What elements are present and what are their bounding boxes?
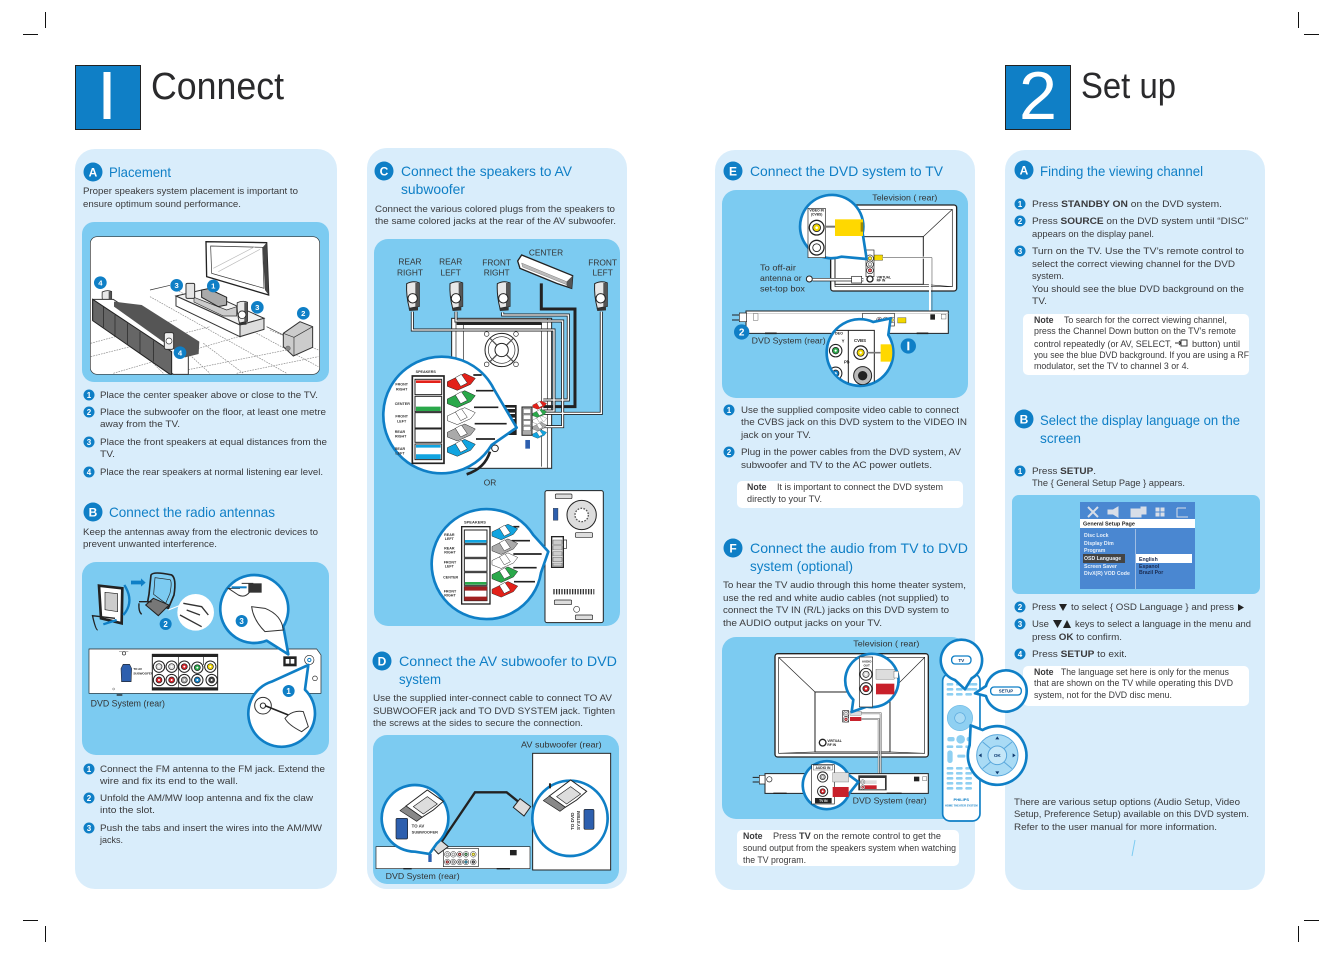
list: antenna steps: Push the tabs and insert the wires into the AM/MW (100, 823, 322, 833)
illustration: room speaker placement: 3 (175, 281, 179, 290)
heading: E Connect the DVD system: Connect the DVD system to TV (750, 163, 944, 179)
illustration: video cable to TV: antenna or (760, 273, 802, 283)
list: placement steps: 2 (87, 408, 92, 417)
text: audio intro (723, 580, 966, 628)
section badge: 1 (76, 66, 140, 130)
illustration: speaker wiring diagram: CENTER (443, 576, 459, 580)
illustration: speaker wiring diagram: SPEAKERS (416, 370, 436, 374)
list: placement steps: Place the subwoofer on the floor, at least one metre (100, 407, 326, 417)
illustration: audio cable TV to DVD: Television ( rear) (853, 639, 919, 649)
text: audio intro: use the red and white audio cables (not supplied) to (723, 593, 949, 603)
list: language steps: press OK to confirm. (1032, 632, 1122, 642)
heading: F Connect the audio (724, 538, 968, 574)
list: channel steps: Turn on the TV. Use the TV’s remote control to (1032, 246, 1244, 256)
text: audio intro: To hear the TV audio through this home theater system, (723, 580, 966, 590)
illustration: antennas wiring: DVD System (rear) (91, 699, 165, 709)
illustration: setup menu screen: OSD Language (1084, 556, 1121, 562)
heading: D Connect the AV subwoofer: system (399, 671, 441, 687)
illustration: video cable to TV: Pb (844, 360, 850, 365)
illustration: audio cable TV to DVD: AUDIO (862, 660, 872, 664)
list: language steps: keys to select a language in the menu and (1075, 619, 1251, 629)
illustration: speaker wiring diagram: RIGHT (397, 268, 423, 278)
note: channel search: modulator, set the TV to channel 3 or 4. (1034, 361, 1189, 371)
heading: D Connect the AV subwoofer: Connect the AV subwoofer to DVD (399, 653, 617, 669)
list: press setup (1014, 466, 1185, 488)
text: subwoofer intro (373, 693, 615, 728)
illustration: audio cable TV to DVD: VIRTUAL (827, 739, 842, 743)
illustration: speaker wiring diagram: REAR (444, 533, 455, 537)
list: DVD to TV steps: subwoofer and TV to the AC power outlets. (741, 460, 932, 470)
note: connect DVD directly (737, 481, 963, 508)
illustration: room speaker placement: 3 (255, 303, 259, 312)
list: language steps: 2 (1018, 603, 1023, 612)
list: channel steps: TV. (1032, 296, 1047, 306)
section badge: 2: 2 (1019, 58, 1057, 134)
illustration: speaker wiring diagram: FRONT (395, 415, 409, 419)
illustration: room speaker placement: 4 (98, 278, 103, 287)
list: DVD to TV steps: 2 (727, 448, 732, 457)
list: language steps (1014, 602, 1251, 660)
illustration: speaker wiring diagram: RIGHT (395, 435, 407, 439)
list: placement steps: Place the rear speakers at normal listening ear level. (100, 467, 323, 477)
text: audio intro: connect the TV IN (R/L) jacks on this DVD system to (723, 605, 949, 615)
illustration: speaker wiring diagram: REAR (395, 430, 406, 434)
list: placement steps: Place the front speakers at equal distances from the (100, 437, 327, 447)
illustration: speaker wiring diagram: FRONT (588, 258, 617, 268)
list: placement steps: TV. (100, 449, 115, 459)
list: antenna steps: Unfold the AM/MW loop antenna and fix the claw (100, 793, 313, 803)
heading: C Connect the speakers (374, 162, 573, 197)
illustration: setup menu screen: Brazil Por (1139, 570, 1163, 576)
list: antenna steps: into the slot. (100, 805, 155, 815)
illustration: remote control with callouts: HOME THEATER SYSTEM (945, 804, 978, 808)
note: language set: that are shown on the TV while operating this DVD (1034, 678, 1233, 688)
heading: C Connect the speakers: C (380, 164, 389, 178)
list: channel steps: appears on the display panel. (1032, 229, 1154, 239)
list: DVD to TV steps: Plug in the power cables from the DVD system, AV (741, 447, 962, 457)
note: language set: Note (1034, 667, 1054, 677)
list: language steps: Press SETUP to exit. (1032, 649, 1127, 659)
note: language set: The language set here is only for the menus (1061, 667, 1230, 677)
note: channel search: you see the blue DVD background. If you are using a RF (1034, 350, 1250, 360)
illustration: speaker wiring diagram: RIGHT (484, 268, 510, 278)
heading: F Connect the audio: F (729, 542, 737, 556)
illustration: speaker wiring diagram: REAR (439, 257, 462, 267)
illustration: speaker wiring diagram: FRONT (395, 383, 409, 387)
illustration: setup menu screen: Disc Lock (1084, 533, 1109, 539)
illustration: video cable to TV: CVBS (854, 338, 866, 343)
list: placement steps (84, 390, 327, 478)
illustration: antennas wiring: SUBWOOFER (133, 671, 154, 675)
text: speakers intro (375, 204, 616, 226)
list: channel steps: system. (1032, 271, 1064, 281)
illustration: setup menu screen: English (1139, 557, 1158, 563)
heading: A Finding the viewing channel: A (1020, 164, 1029, 178)
note: channel search: To search for the correct viewing channel, (1064, 315, 1227, 325)
list: antenna steps: jacks. (99, 835, 123, 845)
illustration: speaker wiring diagram: LEFT (440, 268, 461, 278)
illustration: subwoofer to DVD cable: AV subwoofer (rear) (521, 740, 602, 750)
illustration: video cable to TV: DVD System (rear) (752, 336, 826, 346)
illustration: video cable to TV (722, 190, 968, 398)
list: channel steps (1014, 198, 1248, 306)
note: language set (1023, 666, 1249, 706)
heading: B Connect the radio antennas: B (89, 506, 98, 520)
list: channel steps: select the correct viewing channel for the DVD (1032, 259, 1235, 269)
title: Connect: Connect (151, 66, 284, 108)
illustration: subwoofer to DVD cable: DVD System (rear) (386, 871, 460, 881)
list: DVD to TV steps: the CVBS jack on this DVD system to the VIDEO IN (741, 417, 967, 427)
list: press setup: The { General Setup Page } appears. (1032, 478, 1185, 488)
illustration: audio cable TV to DVD: OUT (863, 663, 870, 667)
illustration: speaker wiring diagram: CENTER (395, 402, 410, 406)
list: language steps: 4 (1018, 650, 1023, 659)
heading: B Connect the radio antennas: Connect the radio antennas (109, 504, 275, 520)
illustration: speaker wiring diagram: LEFT (397, 419, 407, 423)
illustration: audio cable TV to DVD: RF IN (827, 743, 837, 747)
illustration: video cable to TV: DEO (835, 331, 843, 335)
heading: F Connect the audio: system (optional) (750, 558, 853, 574)
illustration: speaker wiring diagram (374, 239, 620, 626)
illustration: speaker wiring diagram: LEFT (445, 564, 455, 568)
list: press setup: 1 (1018, 467, 1023, 476)
text: more setup options: There are various setup options (Audio Setup, Video (1014, 797, 1240, 807)
list: language steps: 3 (1018, 620, 1023, 629)
heading: B Select the display language (1014, 410, 1240, 446)
heading: B Select the display language: Select the display language on the (1040, 412, 1240, 428)
illustration: video cable to TV: 2 (739, 328, 745, 339)
panel: set up (1005, 150, 1265, 890)
illustration: speaker wiring diagram: LEFT (395, 452, 405, 456)
list: language steps: to select { OSD Language } and press (1071, 602, 1234, 612)
illustration: speaker wiring diagram: RIGHT (444, 594, 456, 598)
text: speakers intro: Connect the various colored plugs from the speakers to (375, 204, 615, 214)
illustration: room speaker placement: 4 (178, 348, 183, 357)
illustration: subwoofer to DVD cable: SUBWOOFER (412, 829, 438, 834)
note: TV output (737, 830, 959, 866)
illustration: antennas wiring: 1 (286, 687, 291, 696)
list: DVD to TV steps: 1 (727, 406, 732, 415)
illustration: audio cable TV to DVD (722, 637, 966, 819)
panel: speakers and subwoofer (367, 148, 627, 889)
illustration: video cable to TV: Television ( rear) (872, 193, 937, 203)
list: channel steps: Press STANDBY ON on the DVD system. (1032, 199, 1222, 209)
note: channel search: button) until (1192, 339, 1240, 349)
illustration: speaker wiring diagram: LEFT (592, 268, 613, 278)
heading: B Select the display language: screen (1040, 430, 1081, 446)
heading: B Select the display language: B (1020, 412, 1029, 426)
list: antenna steps (84, 764, 325, 845)
list: placement steps: Place the center speaker above or close to the TV. (100, 390, 318, 400)
list: press setup: Press SETUP. (1032, 466, 1096, 476)
note: TV output: Note (743, 831, 763, 841)
note: connect DVD directly: It is important to connect the DVD system (777, 482, 943, 492)
illustration: video cable to TV: Y (842, 338, 845, 343)
illustration: remote control with callouts (941, 640, 1027, 821)
illustration: antennas wiring: 2 (163, 620, 168, 629)
list: antenna steps: wire and fix its end to the wall. (99, 776, 238, 786)
heading: A Placement: A (89, 166, 98, 180)
list: channel steps: Press SOURCE on the DVD system until “DISC” (1032, 216, 1248, 226)
note: channel search (1023, 314, 1250, 375)
text: more setup options (1014, 797, 1249, 832)
list: antenna steps: 1 (87, 765, 92, 774)
note: connect DVD directly: Note (747, 482, 767, 492)
illustration: setup menu screen (1012, 495, 1260, 594)
illustration: setup menu screen: General Setup Page (1083, 522, 1135, 528)
illustration: room speaker placement: 1 (211, 282, 216, 291)
list: DVD to TV steps (724, 404, 967, 470)
illustration: video cable to TV: VIDEO IN (809, 209, 825, 213)
note: language set: system, not for the DVD disc menu. (1034, 690, 1172, 700)
text: placement intro: Proper speakers system placement is important to (83, 186, 298, 196)
note: TV output: the TV program. (743, 855, 806, 865)
illustration: video cable to TV: set-top box (760, 284, 806, 294)
illustration: speaker wiring diagram: RIGHT (444, 551, 456, 555)
text: speakers intro: the same colored jacks at the rear of the AV subwoofer. (375, 216, 616, 226)
illustration: speaker wiring diagram: REAR (444, 547, 455, 551)
list: placement steps: 4 (87, 468, 92, 477)
illustration: audio cable TV to DVD: DVD System (rear) (853, 796, 927, 806)
illustration: speaker wiring diagram: CENTER (529, 248, 563, 258)
heading: C Connect the speakers: Connect the speakers to AV (401, 163, 573, 179)
text: audio intro: the AUDIO output jacks on your TV. (723, 618, 882, 628)
list: language steps: Use (1032, 619, 1049, 629)
note: channel search: control repeatedly (or AV, SELECT, (1034, 339, 1172, 349)
illustration: room speaker placement (82, 222, 329, 382)
list: antenna steps: 3 (87, 824, 92, 833)
illustration: subwoofer to DVD cable: TO DVD (570, 812, 575, 830)
illustration: room speaker placement: 2 (301, 309, 305, 318)
list: placement steps: away from the TV. (100, 419, 180, 429)
illustration: remote control with callouts: TV (958, 658, 965, 663)
list: antenna steps: 2 (87, 794, 92, 803)
illustration: subwoofer to DVD cable (373, 735, 619, 884)
text: placement intro (83, 186, 298, 209)
note: TV output: Press TV on the remote control to get the (773, 831, 941, 841)
text: antennas intro (83, 527, 318, 549)
illustration: speaker wiring diagram: FRONT (444, 590, 457, 594)
illustration: subwoofer to DVD cable: TO AV (412, 824, 424, 829)
menu icons (1088, 507, 1188, 517)
heading: C Connect the speakers: subwoofer (401, 181, 465, 197)
list: DVD to TV steps: Use the supplied composite video cable to connect (741, 405, 959, 415)
illustration: speaker wiring diagram: LEFT (445, 537, 455, 541)
heading: A Placement (84, 162, 171, 182)
heading: D Connect the AV subwoofer: D (378, 654, 387, 668)
list: placement steps: 1 (87, 391, 92, 400)
section badge: 2 (1006, 58, 1070, 134)
text: antennas intro: Keep the antennas away from the electronic devices to (83, 527, 318, 537)
illustration: speaker wiring diagram: REAR (398, 257, 422, 267)
list: DVD to TV steps: jack on your TV. (740, 430, 811, 440)
illustration: video cable to TV: (CVBS) (811, 213, 822, 217)
list: channel steps: 2 (1018, 217, 1023, 226)
note: TV output: sound output from the speakers system when watching (743, 843, 956, 853)
text: subwoofer intro: the screws at the sides to secure the connection. (373, 718, 583, 728)
panel: DVD to TV (715, 150, 975, 890)
text: subwoofer intro: Use the supplied inter-connect cable to connect TO AV (373, 693, 613, 703)
illustration: antennas wiring: 3 (239, 617, 244, 626)
illustration: video cable to TV: VIRTUAL (877, 275, 891, 279)
illustration: setup menu screen: Display Dim (1084, 541, 1114, 547)
title: Set up: Set up (1081, 65, 1176, 106)
illustration: remote control with callouts: PHILIPS (954, 797, 969, 802)
illustration: speaker wiring diagram: OR (484, 478, 496, 488)
heading: E Connect the DVD system: E (729, 164, 737, 178)
heading: A Finding the viewing channel (1014, 160, 1203, 180)
illustration: setup menu screen: Program (1084, 548, 1106, 554)
illustration: remote control with callouts: SETUP (999, 689, 1013, 694)
illustration: speaker wiring diagram: REAR (395, 447, 406, 451)
list: language steps: Press (1032, 602, 1056, 612)
note: channel search: Note (1034, 315, 1054, 325)
note: connect DVD directly: directly to your TV. (747, 494, 822, 504)
list: channel steps: You should see the blue DVD background on the (1032, 284, 1244, 294)
illustration: speaker wiring diagram: FRONT (482, 258, 511, 268)
text: antennas intro: prevent unwanted interference. (83, 539, 217, 549)
illustration: video cable to TV: To off-air (760, 263, 796, 273)
illustration: speaker wiring diagram: SPEAKERS (464, 519, 486, 524)
illustration: antennas wiring: TO AV (133, 667, 142, 671)
heading: F Connect the audio: Connect the audio from TV to DVD (750, 540, 968, 556)
text: subwoofer intro: SUBWOOFER jack and TO DVD SYSTEM jack. Tighten (373, 706, 615, 716)
text: placement intro: ensure optimum sound performance. (83, 199, 241, 209)
illustration: speaker wiring diagram: RIGHT (396, 387, 408, 391)
list: antenna steps: Connect the FM antenna to the FM jack. Extend the (100, 764, 325, 774)
text: more setup options: Setup, Preference Setup) available on this DVD system. (1014, 809, 1249, 819)
illustration: antennas wiring (82, 562, 329, 755)
heading: A Finding the viewing channel: Finding the viewing channel (1040, 163, 1203, 179)
text: more setup options: Refer to the user manual for more information. (1014, 822, 1217, 832)
illustration: subwoofer to DVD cable: SYSTEM (576, 811, 581, 830)
list: channel steps: 1 (1018, 200, 1023, 209)
list: channel steps: 3 (1018, 247, 1023, 256)
panel: placement and antennas (75, 149, 337, 889)
note: channel search: press the Channel Down button on the TV’s remote (1034, 326, 1236, 336)
illustration: audio cable TV to DVD: TV IN (819, 799, 828, 803)
list: placement steps: 3 (87, 438, 92, 447)
illustration: remote control with callouts: OK (994, 753, 1001, 758)
illustration: audio cable TV to DVD: AUDIO IN (815, 766, 831, 770)
illustration: setup menu screen: Espanol (1139, 564, 1160, 570)
heading: A Placement: Placement (109, 164, 171, 180)
illustration: video cable to TV: RF IN (877, 279, 886, 283)
illustration: setup menu screen: DivX(R) VOD Code (1084, 571, 1130, 577)
heading: D Connect the AV subwoofer (372, 652, 617, 687)
illustration: speaker wiring diagram: FRONT (444, 560, 457, 564)
illustration: setup menu screen: Screen Saver (1084, 564, 1117, 570)
